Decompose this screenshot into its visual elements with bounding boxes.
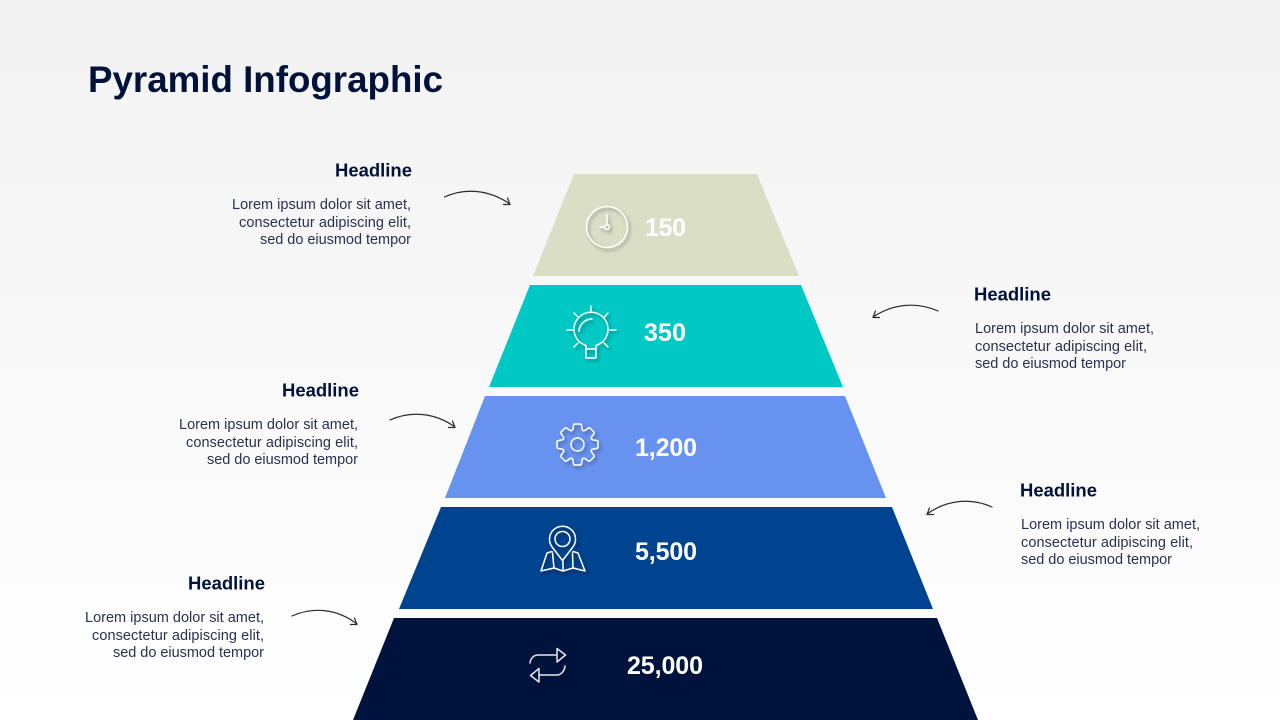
tier 2: 350 xyxy=(489,285,843,387)
callout: second right: Lorem ipsum dolor sit amet, xyxy=(975,321,1154,337)
callout: second right: Headline xyxy=(974,284,1051,304)
callout: middle left: Lorem ipsum dolor sit amet, xyxy=(179,417,358,433)
pyramid xyxy=(353,174,978,720)
icon: repeat arrows xyxy=(530,648,566,682)
callout: bottom left: Lorem ipsum dolor sit amet, xyxy=(85,610,264,626)
callout: top left: sed do eiusmod tempor xyxy=(260,232,411,248)
callout: bottom left: consectetur adipiscing elit, xyxy=(92,628,264,644)
callout: second right: consectetur adipiscing elit, xyxy=(975,339,1147,355)
icon: map pin xyxy=(541,526,585,571)
callout: second right xyxy=(974,284,1154,372)
callout: fourth right: Lorem ipsum dolor sit amet, xyxy=(1021,517,1200,533)
value: 1,200: 1,200 xyxy=(635,434,697,462)
tier 5: 25,000 xyxy=(353,618,978,720)
callout: middle left: Headline xyxy=(282,380,359,400)
value: 350: 350 xyxy=(644,319,686,347)
callout: top left: Lorem ipsum dolor sit amet, xyxy=(232,197,411,213)
callout: fourth right: Headline xyxy=(1020,480,1097,500)
callout: second right: sed do eiusmod tempor xyxy=(975,356,1126,372)
callout: fourth right xyxy=(1020,480,1200,568)
icon: light bulb xyxy=(567,306,616,358)
arrow: top left xyxy=(444,191,510,204)
callout: top left xyxy=(232,160,412,248)
arrow: second right xyxy=(873,305,938,318)
callout: bottom left: Headline xyxy=(188,574,265,594)
icon: clock xyxy=(586,206,628,248)
arrow: middle left xyxy=(390,414,455,428)
value: 150: 150 xyxy=(645,214,686,242)
tier 4: 5,500 xyxy=(399,507,933,609)
callout: fourth right: sed do eiusmod tempor xyxy=(1021,552,1172,568)
title: Pyramid Infographic xyxy=(88,59,443,100)
callout: middle left xyxy=(179,380,359,468)
arrow: fourth right xyxy=(927,501,992,514)
value: 25,000: 25,000 xyxy=(627,652,703,680)
arrow: bottom left xyxy=(292,610,357,624)
tier 3: 1,200 xyxy=(445,396,886,498)
icon: gear xyxy=(557,424,598,465)
callout: fourth right: consectetur adipiscing elit, xyxy=(1021,535,1193,551)
callout: bottom left: sed do eiusmod tempor xyxy=(113,645,264,661)
callout: middle left: consectetur adipiscing elit, xyxy=(186,435,358,451)
callout: top left: consectetur adipiscing elit, xyxy=(239,215,411,231)
callout: bottom left xyxy=(85,574,265,661)
callout: middle left: sed do eiusmod tempor xyxy=(207,452,358,468)
value: 5,500: 5,500 xyxy=(635,538,697,566)
callout: top left: Headline xyxy=(335,160,412,180)
tier 1: 150 xyxy=(533,174,799,276)
